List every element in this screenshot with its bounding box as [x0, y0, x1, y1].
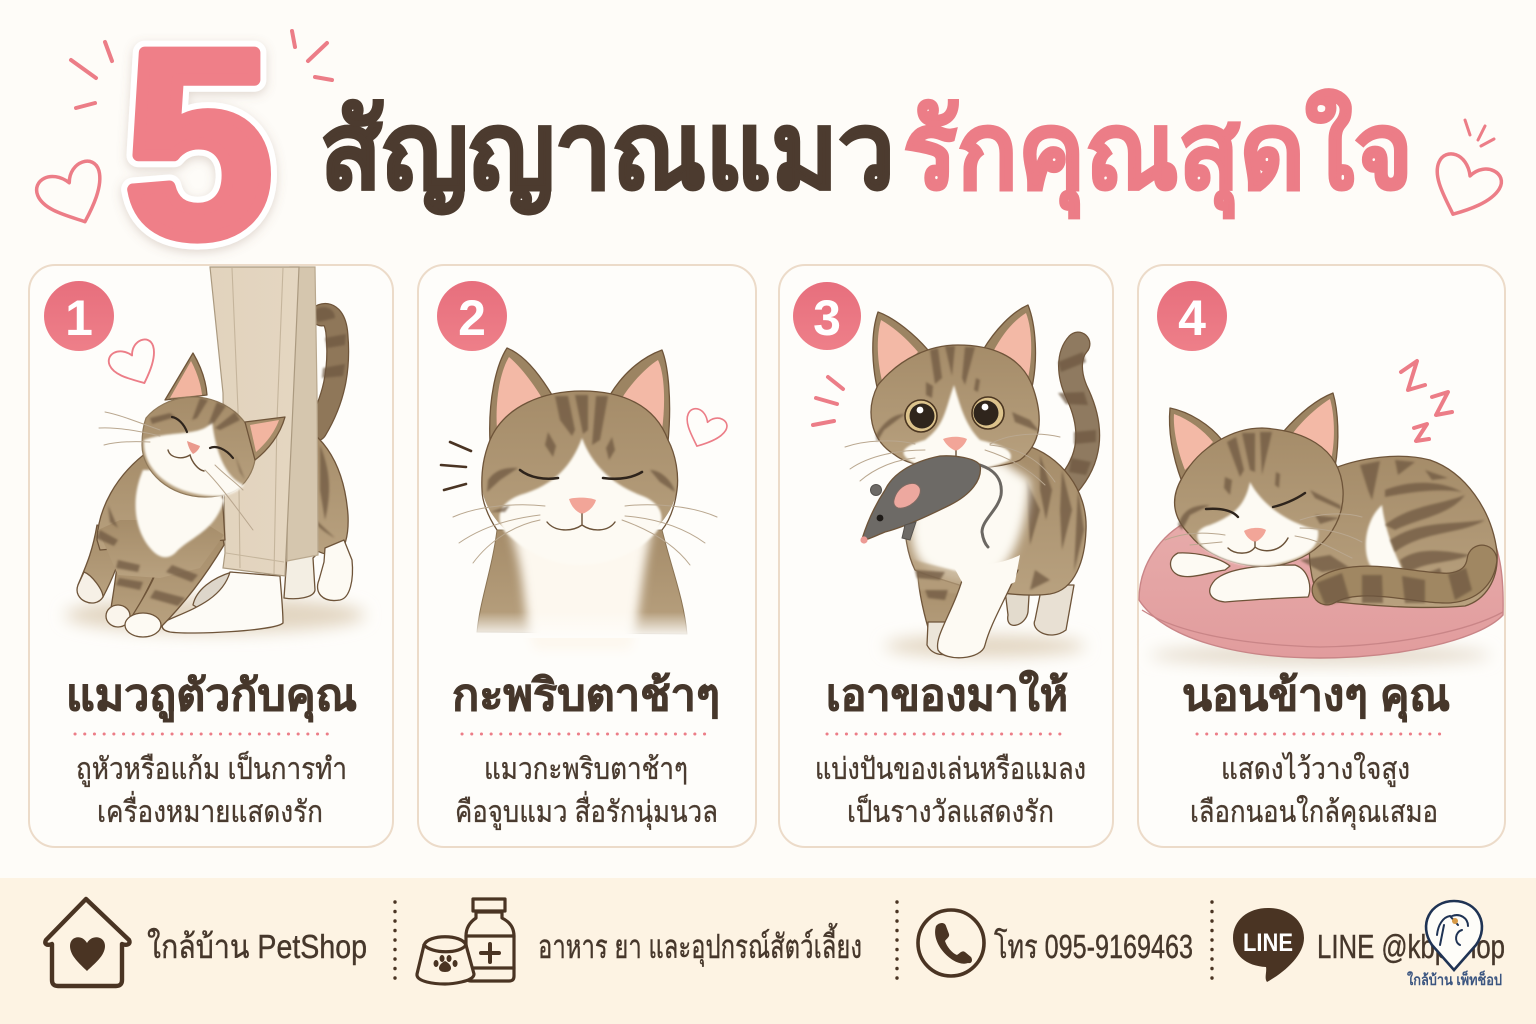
- icon: right sparkle rays: [1465, 120, 1494, 146]
- description: [815, 753, 1086, 829]
- panel: card 1: [29, 265, 393, 847]
- panel: card 2: [418, 265, 756, 847]
- icon: house with heart: [45, 899, 130, 986]
- description: [455, 753, 718, 831]
- cushion: [1139, 520, 1503, 658]
- description: ถูหัวหรือแก้ม เป็นการทำ: [76, 750, 347, 787]
- illustration: cat rubbing against leg: [65, 267, 365, 637]
- description: [1190, 751, 1438, 831]
- icon: phone: [918, 910, 984, 976]
- description: เครื่องหมายแสดงรัก: [97, 791, 323, 829]
- description: แสดงไว้วางใจสูง: [1221, 751, 1410, 787]
- footer text: shop name: ใกล้บ้าน PetShop: [147, 928, 367, 965]
- description: แมวกะพริบตาช้าๆ: [484, 753, 688, 786]
- badge: number 3: 3: [813, 290, 841, 346]
- logo: pin with pets: ใกล้บ้าน เพ็ทช็อป: [1407, 970, 1502, 989]
- panel: card 3: [779, 265, 1113, 847]
- header: [32, 0, 1505, 292]
- heading: กะพริบตาช้าๆ: [452, 671, 720, 720]
- icon: heart: [106, 337, 165, 393]
- badge: number 1: 1: [65, 290, 93, 346]
- illustration: cat carrying toy mouse: [845, 305, 1096, 658]
- badge: number 2: 2: [458, 290, 486, 346]
- description: เป็นรางวัลแสดงรัก: [847, 793, 1054, 829]
- title pink part: รักคุณสุดใจ: [903, 90, 1413, 219]
- badge: number 4: 4: [1178, 290, 1206, 346]
- footer text: phone number: โทร 095-9169463: [994, 928, 1193, 965]
- description: แบ่งปันของเล่นหรือแมลง: [815, 753, 1086, 786]
- panel: card 4: [1138, 265, 1505, 847]
- heading: เอาของมาให้: [826, 669, 1068, 720]
- footer band: [0, 878, 1536, 1024]
- big number 5: 5: [125, 0, 272, 292]
- icon: LINE bubble: LINE: [1243, 929, 1293, 957]
- description: เลือกนอนใกล้คุณเสมอ: [1190, 795, 1438, 831]
- icon: motion lines: [441, 442, 471, 490]
- icon: left heart: [32, 157, 115, 234]
- badge: number 1: [44, 281, 114, 351]
- heading: นอนข้างๆ คุณ: [1182, 671, 1450, 723]
- icon: motion lines: [813, 377, 843, 425]
- icon: LINE bubble: [1233, 908, 1304, 982]
- icon: heart: [678, 406, 729, 454]
- heading: แมวถูตัวกับคุณ: [66, 671, 357, 723]
- description: คือจูบแมว สื่อรักนุ่มนวล: [455, 791, 718, 831]
- title dark part: สัญญาณแมว: [320, 90, 895, 215]
- badge: number 2: [437, 281, 507, 351]
- description: [76, 750, 347, 829]
- big number 5: 5: [125, 0, 272, 292]
- logo: pin with pets: [1407, 901, 1502, 989]
- footer text: products: อาหาร ยา และอุปกรณ์สัตว์เลี้ยง: [538, 923, 862, 967]
- icon: left sparkle rays: [71, 31, 332, 108]
- badge: number 4: [1157, 281, 1227, 351]
- illustration: cat slow blink: [453, 348, 717, 650]
- badge: number 3: [793, 282, 861, 350]
- icon: right heart: [1422, 149, 1505, 227]
- icon: bowl and medicine bottle: [417, 899, 514, 984]
- icon: zzz: [1401, 361, 1452, 441]
- illustration: cat sleeping on cushion: [1139, 393, 1503, 665]
